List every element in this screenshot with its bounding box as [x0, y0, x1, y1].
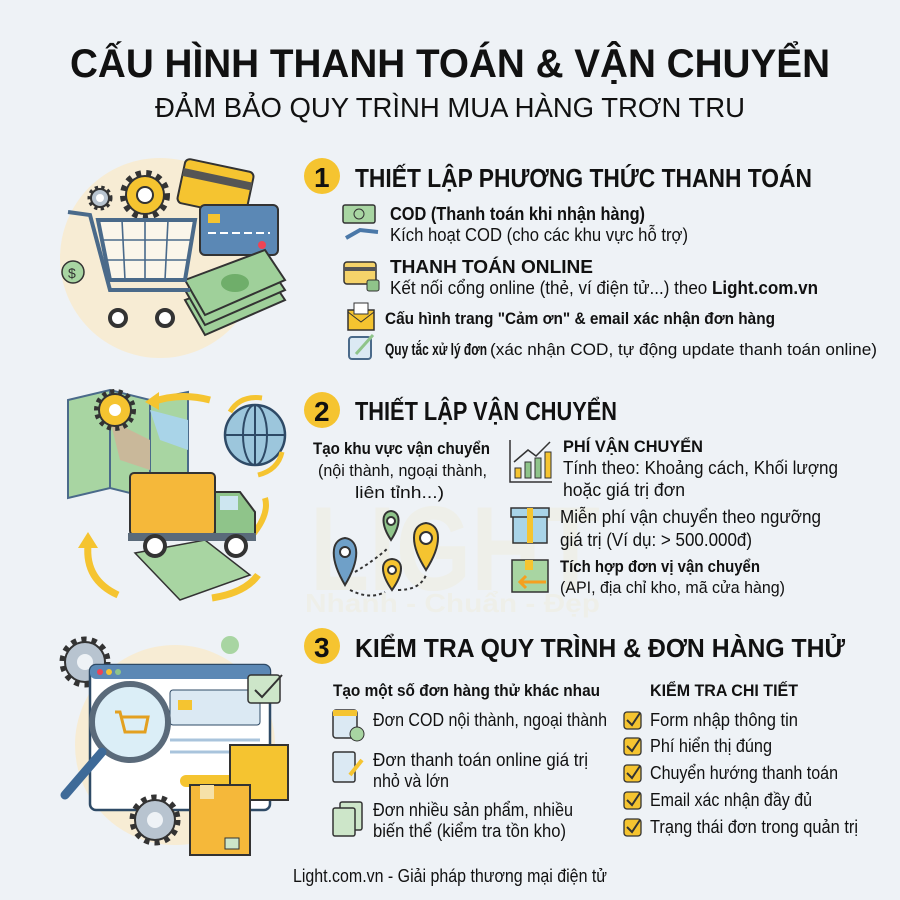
illustration: shipping: [68, 390, 285, 600]
text: free shipping: giá trị (Ví dụ: > 500.000đ): [560, 530, 752, 550]
checklist: [624, 710, 858, 837]
section 1 number: 1: [314, 162, 330, 193]
column header: test orders: Tạo một số đơn hàng thử khác nhau: [333, 681, 600, 700]
text: fee: Tính theo: Khoảng cách, Khối lượng: [563, 458, 838, 478]
icon: map pins: [334, 511, 438, 596]
icon: edit: [349, 335, 373, 359]
footer: Light.com.vn - Giải pháp thương mại điện tử: [293, 866, 607, 886]
icon: doc pen: [333, 752, 362, 782]
text: rules: Quy tắc xử lý đơn: [385, 340, 487, 359]
illustration: payment: $: [68, 265, 76, 281]
icon: docs: [333, 802, 362, 836]
text: order online: [373, 750, 588, 791]
checklist: Phí hiển thị đúng: [650, 736, 772, 756]
text: COD: COD (Thanh toán khi nhận hàng): [390, 204, 645, 224]
text: order multi: Đơn nhiều sản phẩm, nhiều: [373, 800, 573, 820]
text: online: THANH TOÁN ONLINE: [390, 256, 593, 277]
text: order online: Đơn thanh toán online giá trị: [373, 750, 588, 770]
text: COD: [390, 204, 688, 245]
text: fee: [563, 437, 838, 500]
icon: box: [512, 560, 548, 592]
text: thank you: Cấu hình trang "Cảm ơn" & email xác nhận đơn hàng: [385, 309, 775, 328]
icon: cash hand: [343, 205, 378, 238]
column header: checklist: KIỂM TRA CHI TIẾT: [650, 681, 799, 700]
illustration: payment: [60, 158, 285, 358]
section 2 heading: THIẾT LẬP VẬN CHUYỂN: [355, 396, 617, 426]
text: zones: Tạo khu vực vận chuyển: [313, 439, 490, 458]
icon: gift: [511, 508, 549, 543]
text: carriers: (API, địa chỉ kho, mã cửa hàng): [560, 578, 785, 597]
text: rules: (xác nhận COD, tự động update thanh toán online): [490, 340, 877, 359]
text: zones: liên tỉnh...): [355, 483, 444, 502]
illustration: testing: [63, 636, 288, 855]
subtitle: ĐẢM BẢO QUY TRÌNH MUA HÀNG TRƠN TRU: [155, 91, 745, 123]
icon: chart: [510, 440, 552, 482]
icon: order card: [333, 710, 364, 741]
text: zones: [313, 439, 490, 502]
text: order online: nhỏ và lớn: [373, 771, 449, 791]
section 2 number: [304, 392, 340, 428]
section 1 heading: THIẾT LẬP PHƯƠNG THỨC THANH TOÁN: [355, 163, 812, 193]
title: CẤU HÌNH THANH TOÁN & VẬN CHUYỂN: [70, 39, 830, 86]
text: free shipping: [560, 506, 821, 550]
text: carriers: [560, 557, 785, 597]
checklist: Chuyển hướng thanh toán: [650, 763, 838, 783]
text: zones: (nội thành, ngoại thành,: [318, 461, 487, 480]
section 3 number: [304, 628, 340, 664]
section 1 number: [304, 158, 340, 194]
watermark: Nhanh - Chuẩn - Đẹp: [305, 588, 600, 618]
text: order multi: [373, 800, 573, 841]
checklist: Email xác nhận đầy đủ: [650, 790, 812, 810]
text: order COD: Đơn COD nội thành, ngoại thành: [373, 710, 607, 730]
text: carriers: Tích hợp đơn vị vận chuyển: [560, 557, 760, 576]
section 2 number: 2: [314, 396, 330, 427]
section 3 heading: KIỂM TRA QUY TRÌNH & ĐƠN HÀNG THỬ: [355, 632, 845, 663]
icon: card lock: [344, 262, 379, 291]
icon: mail: [348, 303, 374, 330]
text: online: [390, 256, 818, 298]
section 3 number: 3: [314, 632, 330, 663]
checklist: Form nhập thông tin: [650, 710, 798, 730]
text: fee: PHÍ VẬN CHUYỂN: [563, 437, 703, 456]
text: fee: hoặc giá trị đơn: [563, 480, 685, 500]
watermark: LIGHT: [310, 482, 600, 616]
text: free shipping: Miễn phí vận chuyển theo ngưỡng: [560, 506, 821, 527]
checklist: Trạng thái đơn trong quản trị: [650, 817, 858, 837]
text: online: Kết nối cổng online (thẻ, ví điện tử...) theo Light.com.vn: [390, 278, 818, 298]
text: COD: Kích hoạt COD (cho các khu vực hỗ trợ): [390, 224, 688, 245]
text: order multi: biến thể (kiểm tra tồn kho): [373, 821, 566, 841]
